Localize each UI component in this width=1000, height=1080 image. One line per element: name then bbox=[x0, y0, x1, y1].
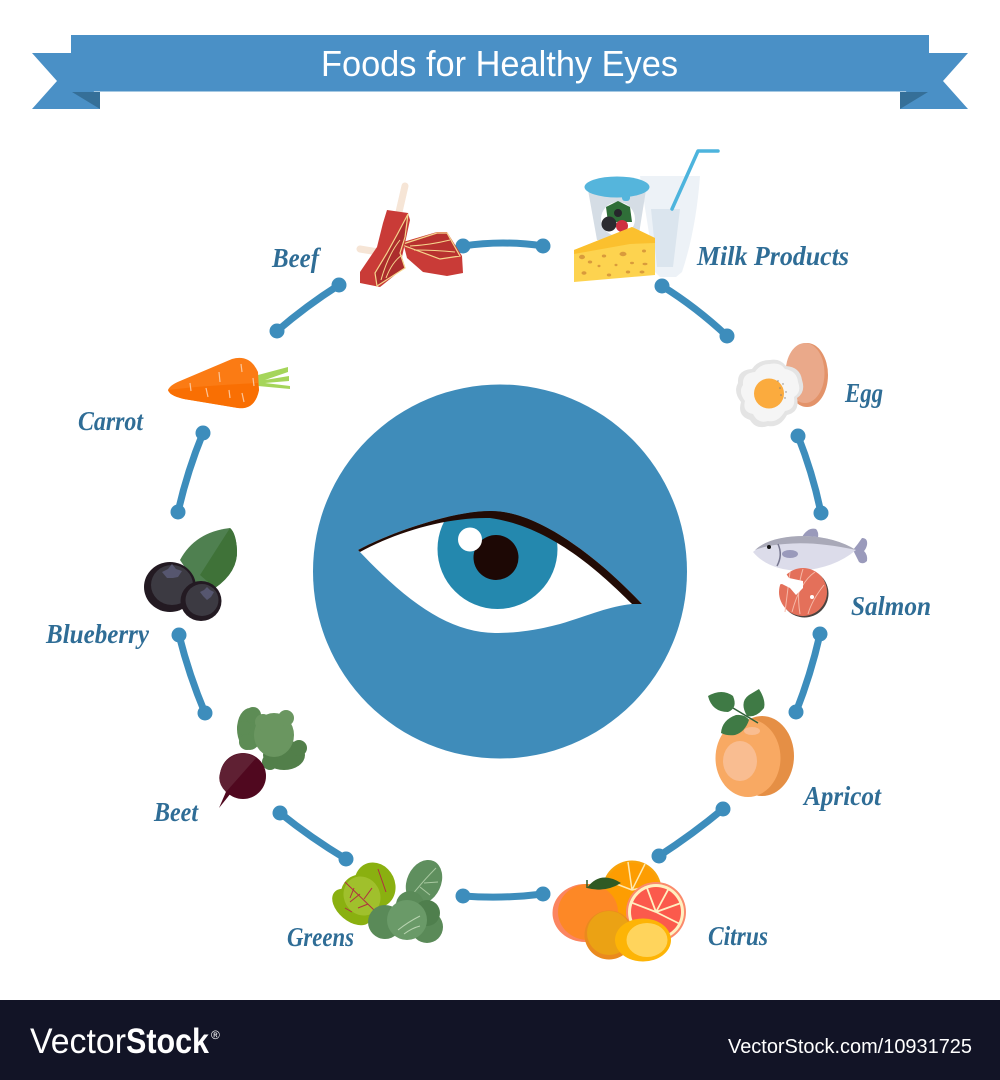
footer bar bbox=[0, 1000, 1000, 1080]
labels: Milk Products bbox=[696, 241, 849, 271]
food: beet bbox=[219, 707, 307, 808]
food: beef bbox=[360, 186, 463, 287]
labels: Apricot bbox=[802, 781, 882, 811]
footer logo bbox=[30, 1022, 220, 1061]
labels: Egg bbox=[844, 378, 883, 408]
food: blueberry bbox=[144, 528, 237, 621]
labels: Beet bbox=[153, 797, 199, 827]
labels: Greens bbox=[287, 922, 354, 952]
food: carrot bbox=[168, 358, 290, 408]
labels: Citrus bbox=[708, 921, 768, 951]
food: apricot bbox=[708, 689, 794, 797]
labels bbox=[45, 241, 931, 952]
labels: Carrot bbox=[78, 406, 144, 436]
central eye bbox=[313, 384, 687, 758]
title: Foods for Healthy Eyes bbox=[321, 43, 678, 84]
labels: Salmon bbox=[851, 591, 931, 621]
labels: Beef bbox=[271, 243, 322, 273]
title banner bbox=[32, 35, 968, 109]
footer logo: Vector bbox=[30, 1022, 126, 1061]
food: greens bbox=[325, 854, 449, 943]
footer image id: VectorStock.com/10931725 bbox=[728, 1036, 972, 1058]
footer logo: Stock bbox=[126, 1022, 209, 1061]
footer logo: ® bbox=[211, 1028, 220, 1042]
food: salmon bbox=[753, 529, 867, 618]
food: citrus bbox=[552, 860, 686, 962]
ring connectors bbox=[170, 238, 828, 904]
labels: Blueberry bbox=[45, 619, 150, 649]
food: egg bbox=[736, 343, 828, 427]
food: milk products bbox=[574, 151, 718, 282]
